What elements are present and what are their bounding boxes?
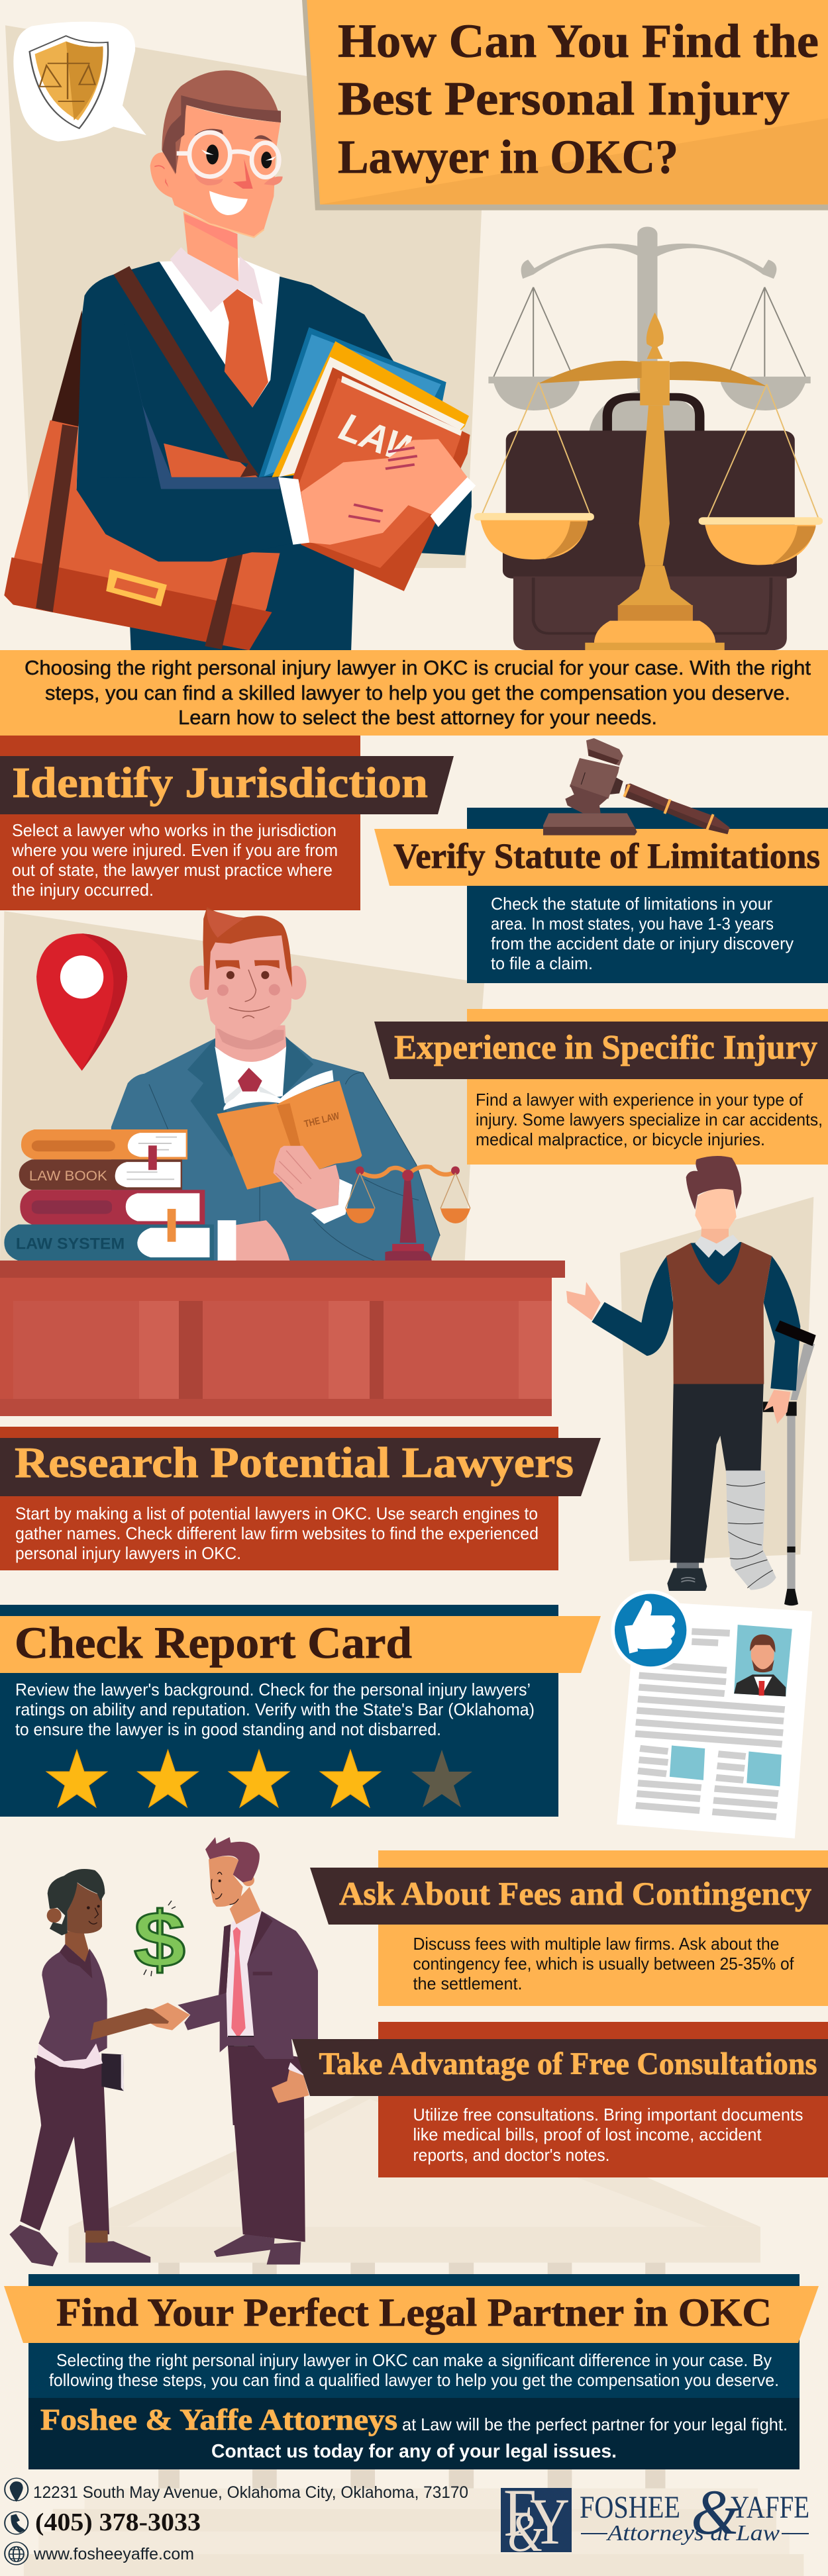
body text: the injury occurred. bbox=[12, 880, 154, 900]
glasses bbox=[177, 132, 279, 177]
body text bbox=[15, 1680, 535, 1739]
shoe bbox=[667, 1563, 707, 1591]
body text: area. In most states, you have 1-3 years bbox=[491, 914, 774, 933]
call to action: Contact us today for any of your legal issues. bbox=[211, 2441, 617, 2462]
title text: How Can You Find the bbox=[338, 15, 819, 68]
body text: ratings on ability and reputation. Verify with the State's Bar (Oklahoma) bbox=[15, 1699, 535, 1719]
body text: to file a claim. bbox=[491, 953, 593, 973]
man pants and belt bbox=[228, 2046, 303, 2125]
logo: Foshee and Yaffe: F bbox=[503, 2475, 537, 2551]
body text: to ensure the lawyer is in good standing and not disbarred. bbox=[15, 1719, 441, 1739]
icon: thumbs up badge bbox=[611, 1590, 690, 1670]
body text: personal injury lawyers in OKC. bbox=[15, 1543, 241, 1563]
logo: Foshee and Yaffe bbox=[501, 2475, 809, 2563]
body text bbox=[413, 1934, 794, 1993]
heading: Find Your Perfect Legal Partner in OKC bbox=[56, 2291, 772, 2334]
hair bbox=[203, 907, 292, 990]
body text bbox=[413, 2105, 803, 2165]
jacket bbox=[77, 262, 472, 650]
body text: Discuss fees with multiple law firms. Ask about the bbox=[413, 1934, 779, 1954]
woman bbox=[35, 2055, 104, 2125]
crutch bbox=[790, 1344, 815, 1400]
conclusion text: Selecting the right personal injury lawyer in OKC can make a significant difference in your case. By bbox=[56, 2350, 772, 2370]
illustration: speech bubble with shield bbox=[13, 22, 146, 142]
heading: Verify Statute of Limitations bbox=[393, 836, 820, 876]
tie bbox=[238, 1068, 262, 1092]
face bbox=[164, 105, 280, 237]
court building background bbox=[24, 2073, 803, 2576]
panel: experience in specific injury bbox=[374, 1009, 828, 1165]
gold scale bbox=[639, 312, 670, 566]
vest bbox=[666, 1242, 772, 1384]
heading: Check Report Card bbox=[15, 1617, 412, 1668]
intro text: steps, you can find a skilled lawyer to help you get the compensation you deserve. bbox=[45, 681, 790, 704]
man tie bbox=[231, 1927, 246, 2038]
body text: Check the statute of limitations in your bbox=[491, 894, 772, 914]
bag bbox=[4, 420, 280, 650]
neck bbox=[183, 212, 238, 281]
intro text bbox=[25, 656, 811, 729]
body text: Start by making a list of potential lawyers in OKC. Use search engines to bbox=[15, 1503, 538, 1523]
address: 12231 South May Avenue, Oklahoma City, Oklahoma, 73170 bbox=[33, 2483, 468, 2502]
sleeve bbox=[77, 477, 293, 561]
title text: Best Personal Injury bbox=[338, 72, 790, 125]
panel: identify jurisdiction bbox=[0, 736, 454, 910]
body text bbox=[476, 1090, 823, 1149]
back strap bbox=[51, 310, 87, 427]
icon: globe bbox=[5, 2542, 28, 2565]
icon: dollar sign: $ bbox=[134, 1895, 185, 1984]
icon: map pin bbox=[36, 933, 127, 1071]
illustration: resume with thumbs up bbox=[611, 1590, 812, 1838]
suit bbox=[111, 1036, 440, 1261]
book title: LAW bbox=[331, 406, 430, 473]
illustration: business handshake bbox=[9, 1837, 318, 2266]
body text: Find a lawyer with experience in your type of bbox=[476, 1090, 803, 1110]
hair bbox=[686, 1156, 741, 1210]
illustration: lawyer head bbox=[150, 70, 283, 324]
phone number: (405) 378-3033 bbox=[35, 2508, 201, 2536]
body text: contingency fee, which is usually between 25-35% of bbox=[413, 1954, 794, 1974]
body text: reports, and doctor's notes. bbox=[413, 2145, 609, 2165]
left arm bbox=[566, 1282, 601, 1320]
open book bbox=[223, 1070, 334, 1110]
logo: Foshee and Yaffe: Attorneys at Law bbox=[606, 2521, 780, 2546]
body text: where you were injured. Even if you are from bbox=[11, 840, 338, 860]
panel: check report card bbox=[0, 1605, 601, 1817]
man jacket bbox=[178, 1911, 318, 2059]
body text: out of state, the lawyer must practice where bbox=[12, 860, 333, 880]
blush and nose bbox=[194, 173, 283, 185]
panel: take advantage of free consultations bbox=[292, 2022, 828, 2177]
collar bbox=[170, 247, 263, 312]
body text bbox=[491, 894, 794, 973]
panel: verify statute of limitations bbox=[374, 808, 828, 983]
book label: THE LAW bbox=[303, 1110, 340, 1129]
woman arm bbox=[91, 2008, 169, 2040]
man lower hand bbox=[288, 2062, 305, 2075]
firm tagline: at Law will be the perfect partner for your legal fight. bbox=[402, 2414, 788, 2434]
panel: conclusion bbox=[4, 2274, 819, 2469]
eyes bbox=[206, 144, 219, 164]
body text bbox=[11, 820, 338, 900]
illustration: desk bbox=[0, 1261, 565, 1416]
illustration: lawyer reading at desk bbox=[111, 907, 470, 1261]
title text bbox=[338, 15, 819, 183]
hero background shape bbox=[5, 25, 482, 568]
leg cast bbox=[726, 1470, 776, 1590]
body text: the settlement. bbox=[413, 1974, 522, 1993]
body text bbox=[15, 1503, 539, 1563]
label: LAW SYSTEM bbox=[16, 1234, 125, 1253]
body text: like medical bills, proof of lost income, accident bbox=[413, 2124, 762, 2144]
logo: Foshee and Yaffe: FOSHEE bbox=[580, 2490, 680, 2525]
firm name: Foshee & Yaffe Attorneys bbox=[40, 2403, 397, 2436]
icon: gavel bbox=[543, 738, 730, 835]
website: www.fosheeyaffe.com bbox=[33, 2545, 194, 2563]
right arm bbox=[764, 1256, 800, 1391]
heading: Take Advantage of Free Consultations bbox=[319, 2046, 817, 2081]
heading: Ask About Fees and Contingency bbox=[339, 1875, 811, 1912]
hair bbox=[162, 70, 281, 174]
panel: ask about fees and contingency bbox=[310, 1850, 828, 2006]
briefcase bbox=[607, 397, 699, 432]
upper bodies bbox=[35, 1837, 318, 2125]
body text: medical malpractice, or bicycle injuries. bbox=[476, 1129, 765, 1149]
intro text: Choosing the right personal injury lawyer in OKC is crucial for your case. With the right bbox=[25, 656, 811, 679]
illustration: lawyer with books and bag bbox=[4, 258, 476, 650]
star rating bbox=[46, 1750, 472, 1807]
conclusion text: following these steps, you can find a qualified lawyer to help you get the compensation you deserve. bbox=[49, 2370, 779, 2390]
neck bbox=[215, 1026, 286, 1062]
head bbox=[189, 966, 213, 1000]
logo: Foshee and Yaffe: Y bbox=[530, 2485, 570, 2558]
face bbox=[695, 1188, 737, 1229]
contact details bbox=[5, 2478, 468, 2565]
body text: from the accident date or injury discovery bbox=[491, 933, 794, 953]
hands bbox=[273, 1146, 339, 1210]
neck and collar bbox=[701, 1217, 729, 1244]
brows and features bbox=[215, 960, 280, 969]
man head bbox=[230, 1887, 260, 1925]
body text: gather names. Check different law firm websites to find the experienced bbox=[15, 1523, 539, 1543]
hands bbox=[386, 439, 468, 516]
conclusion text bbox=[49, 2350, 779, 2390]
mouth bbox=[209, 191, 248, 215]
logo: Foshee and Yaffe: & bbox=[691, 2477, 740, 2548]
icon: phone bbox=[5, 2512, 28, 2534]
heading: Research Potential Lawyers bbox=[15, 1439, 574, 1487]
logo: Foshee and Yaffe: YAFFE bbox=[731, 2490, 809, 2525]
legs bbox=[670, 1384, 764, 1563]
intro banner bbox=[0, 650, 828, 736]
title text: Lawyer in OKC? bbox=[338, 130, 678, 183]
heading: Identify Jurisdiction bbox=[12, 759, 428, 807]
body text: Utilize free consultations. Bring important documents bbox=[413, 2105, 803, 2124]
label: LAW BOOK bbox=[29, 1169, 107, 1184]
chest strap bbox=[113, 266, 259, 477]
grey scale bbox=[488, 226, 811, 483]
man handshake hand bbox=[147, 2003, 190, 2030]
body text: Review the lawyer's background. Check for the personal injury lawyers’ bbox=[15, 1680, 531, 1699]
illustration: law book stack bbox=[4, 1129, 214, 1261]
middle background shape bbox=[0, 911, 484, 1262]
title panel bbox=[302, 0, 828, 211]
ear bbox=[150, 152, 176, 199]
heading: Experience in Specific Injury bbox=[394, 1029, 817, 1067]
icon: location bbox=[5, 2478, 28, 2501]
logo: Foshee and Yaffe: & bbox=[507, 2502, 545, 2563]
intro text: Learn how to select the best attorney for your needs. bbox=[178, 706, 657, 729]
brows bbox=[194, 129, 273, 142]
man shirt bbox=[227, 1908, 260, 2037]
books bbox=[259, 327, 446, 477]
cuffs bbox=[278, 477, 309, 545]
tie bbox=[225, 291, 268, 407]
small scale bbox=[345, 1167, 470, 1261]
body text: Select a lawyer who works in the jurisdiction bbox=[12, 820, 336, 840]
panel: research potential lawyers bbox=[0, 1427, 601, 1570]
shirt bbox=[160, 258, 280, 407]
illustration: injured man on crutch bbox=[566, 1156, 816, 1605]
legs bbox=[9, 2046, 305, 2266]
illustration: briefcase and scales bbox=[474, 226, 823, 651]
woman head bbox=[47, 1908, 62, 1923]
shirt bbox=[215, 1047, 286, 1103]
